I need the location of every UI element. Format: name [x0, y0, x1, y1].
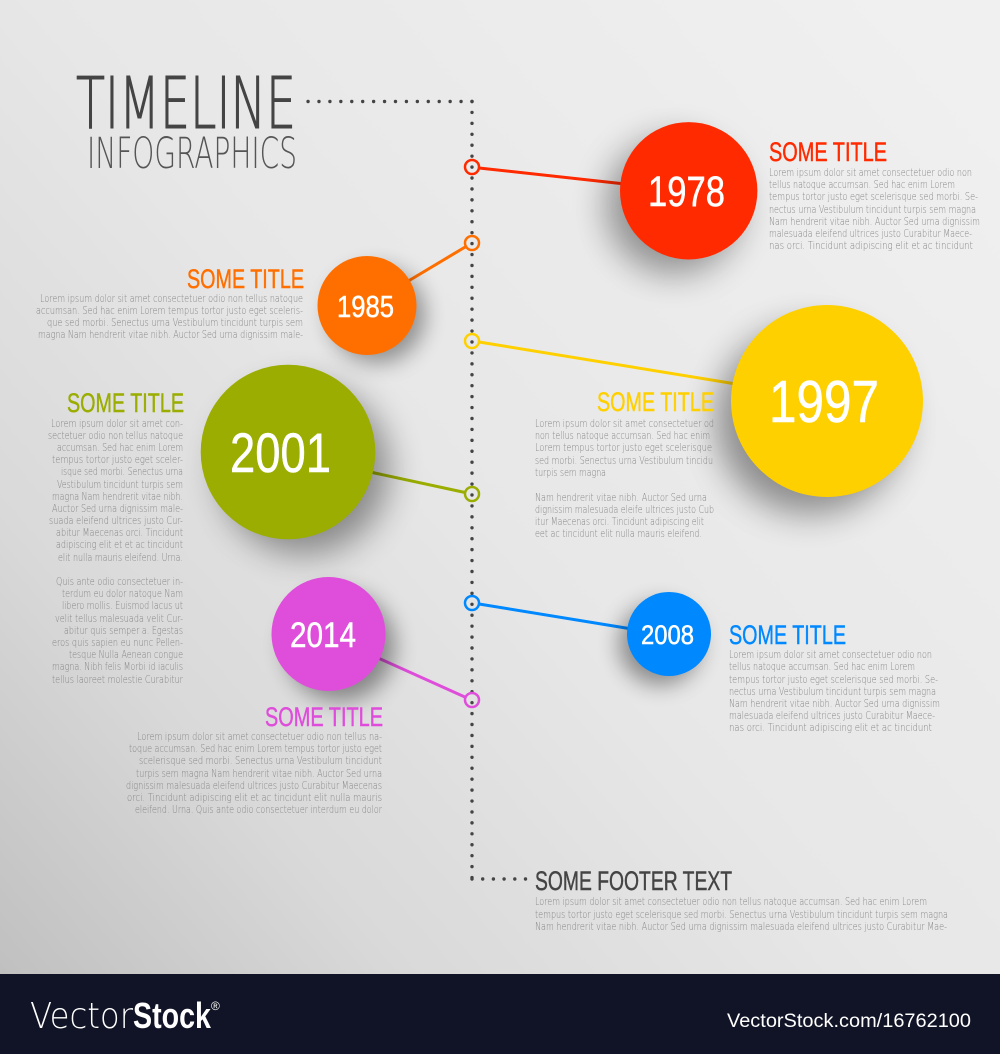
text block: 2014 [126, 702, 383, 816]
watermark bar: VectorStock.com/16762100 [727, 1011, 971, 1032]
text block: 2001: SOME TITLE [67, 388, 184, 418]
text block: 2008: Nam hendrerit vitae nibh. Auctor Sed urna dignissim [729, 698, 940, 710]
footer text block [535, 866, 948, 933]
title: TIMELINE [76, 62, 296, 145]
text block: 2001: tellus laoreet molestie Curabitur [52, 674, 183, 686]
circle: 1978: 1978 [648, 168, 725, 216]
circle: 2014: 2014 [290, 616, 356, 655]
node: 1997 [465, 334, 479, 348]
text block: 2001: terdum eu dolor natoque Nam [62, 588, 183, 600]
circle: 1997: 1997 [769, 369, 879, 435]
circle: 1978 [606, 122, 757, 274]
circle: 2014 [272, 577, 395, 701]
watermark bar [0, 974, 1000, 1054]
title [76, 62, 297, 179]
text block: 2001: abitur quis semper a. Egestas [64, 625, 183, 637]
text block: 2014: Lorem ipsum dolor sit amet consectetuer odio non tellus na- [137, 731, 382, 743]
footer text block: SOME FOOTER TEXT [535, 866, 732, 896]
node: 2001 [465, 487, 479, 501]
text block: 1985: magna Nam hendrerit vitae nibh. Auctor Sed urna dignissim male- [38, 329, 303, 341]
text block: 2014: toque accumsan. Sed hac enim Lorem tempus tortor justo eget [129, 743, 382, 755]
text block: 2001: Lorem ipsum dolor sit amet con- [51, 418, 183, 430]
connector: 2001 [370, 472, 465, 492]
connector: 2008 [479, 604, 632, 629]
text block: 1985: Lorem ipsum dolor sit amet consectetuer odio non tellus natoque [40, 293, 303, 305]
text block: 2001: adipiscing elit et et ac tincidunt [56, 539, 183, 551]
circle: 2001: 2001 [230, 421, 331, 484]
text block: 2001: Quis ante odio consectetuer in- [56, 576, 183, 588]
text block: 2001: Vestibulum tincidunt turpis sem [57, 479, 183, 491]
text block: 1985 [36, 264, 304, 341]
circle: 1985 [318, 256, 425, 363]
text block: 2001: Auctor Sed urna dignissim male- [52, 503, 183, 515]
text block: 1997: Nam hendrerit vitae nibh. Auctor Sed urna [535, 492, 707, 504]
circle: 2008: 2008 [641, 620, 694, 650]
text block: 2001: magna Nam hendrerit vitae nibh. [52, 491, 183, 503]
connector: 1978 [479, 168, 625, 184]
dotted timeline axis [307, 102, 527, 880]
circle: 2008 [619, 592, 711, 685]
text block: 2001: eros quis sapien eu nunc Pellen- [52, 637, 183, 649]
text block: 2001: magna. Nibh felis Morbi id iaculis [52, 661, 183, 673]
text block: 2014: eleifend. Urna. Quis ante odio consectetuer interdum eu dolor [135, 804, 382, 816]
watermark bar: Vector [30, 996, 133, 1037]
connector: 1985 [405, 246, 466, 283]
text block: 1997: SOME TITLE [597, 387, 714, 417]
text block: 1997: Lorem tempus tortor justo eget scelerisque [535, 442, 712, 454]
text block: 2014: dignissim malesuada eleifend ultrices justo Curabitur Maecenas [126, 780, 382, 792]
text block: 1997: itur Maecenas orci. Tincidunt adipiscing elit [535, 516, 704, 528]
title: INFOGRAPHICS [87, 130, 297, 179]
text block: 1997: sed morbi. Senectus urna Vestibulum tincidu [535, 455, 713, 467]
connector: 1997 [479, 342, 736, 384]
text block: 2001: libero mollis. Euismod lacus ut [62, 600, 183, 612]
text block: 2008: SOME TITLE [729, 620, 846, 650]
text block: 1997: dignissim malesuada eleife ultrices justo Cub [535, 504, 714, 516]
text block: 1997: turpis sem magna [535, 467, 606, 479]
text block: 2008: tellus natoque accumsan. Sed hac enim Lorem [729, 661, 915, 673]
text block: 1985: SOME TITLE [187, 264, 304, 294]
text block: 2001: velit tellus malesuada velit Cur- [55, 613, 183, 625]
text block: 2008 [729, 620, 940, 734]
text block: 1978 [769, 137, 980, 252]
watermark bar: ® [211, 999, 220, 1013]
text block: 2001 [48, 388, 184, 686]
text block: 2008: malesuada eleifend ultrices justo Curabitur Maece- [729, 710, 935, 722]
text block: 1997: non tellus natoque accumsan. Sed hac enim [535, 430, 710, 442]
text block: 1985: accumsan. Sed hac enim Lorem tempus tortor justo eget sceleris- [36, 305, 303, 317]
text block: 2008: nectus urna Vestibulum tincidunt turpis sem magna [729, 686, 936, 698]
text block: 2014: turpis sem magna Nam hendrerit vitae nibh. Auctor Sed urna [136, 768, 382, 780]
text block: 2008: nas orci. Tincidunt adipiscing elit et ac tincidunt [729, 722, 932, 734]
text block: 2014: scelerisque sed morbi. Senectus urna Vestibulum tincidunt [139, 755, 382, 767]
text block: 2008: tempus tortor justo eget scelerisque sed morbi. Se- [729, 674, 938, 686]
text block: 1997 [535, 387, 714, 540]
text block: 2001: abitur Maecenas orci. Tincidunt [56, 527, 183, 539]
text block: 2001: accumsan. Sed hac enim Lorem [57, 442, 183, 454]
text block: 2014: SOME TITLE [265, 702, 383, 732]
watermark bar: Stock [133, 995, 212, 1036]
connector: 2014 [376, 657, 466, 698]
text block: 2008: Lorem ipsum dolor sit amet consectetuer odio non [729, 649, 932, 661]
node: 2014 [465, 693, 479, 707]
text block: 1997: Lorem ipsum dolor sit amet consectetuer od [535, 418, 714, 430]
text block: 1997: eet ac tincidunt elit nulla mauris eleifend. [535, 528, 702, 540]
text block: 2001: tempus tortor justo eget sceler- [52, 454, 183, 466]
circle: 1997 [716, 305, 923, 514]
text block: 1978: SOME TITLE [769, 137, 887, 167]
node: 1978 [465, 160, 479, 174]
circle: 2001 [201, 365, 389, 554]
text block: 1985: que sed morbi. Senectus urna Vestibulum tincidunt turpis sem [47, 317, 303, 329]
text block: 2001: elit nulla mauris eleifend. Urna. [58, 552, 183, 564]
circle: 1985: 1985 [337, 289, 394, 324]
text block: 2001: sectetuer odio non tellus natoque [48, 430, 183, 442]
text block: 2014: orci. Tincidunt adipiscing elit et ac tincidunt elit nulla mauris [127, 792, 382, 804]
text block: 2001: tesque Nulla Aenean congue [69, 649, 183, 661]
node: 1985 [465, 236, 479, 250]
text block: 2001: isque sed morbi. Senectus urna [61, 466, 183, 478]
node: 2008 [465, 596, 479, 610]
text block: 2001: suada eleifend ultrices justo Cur- [49, 515, 183, 527]
